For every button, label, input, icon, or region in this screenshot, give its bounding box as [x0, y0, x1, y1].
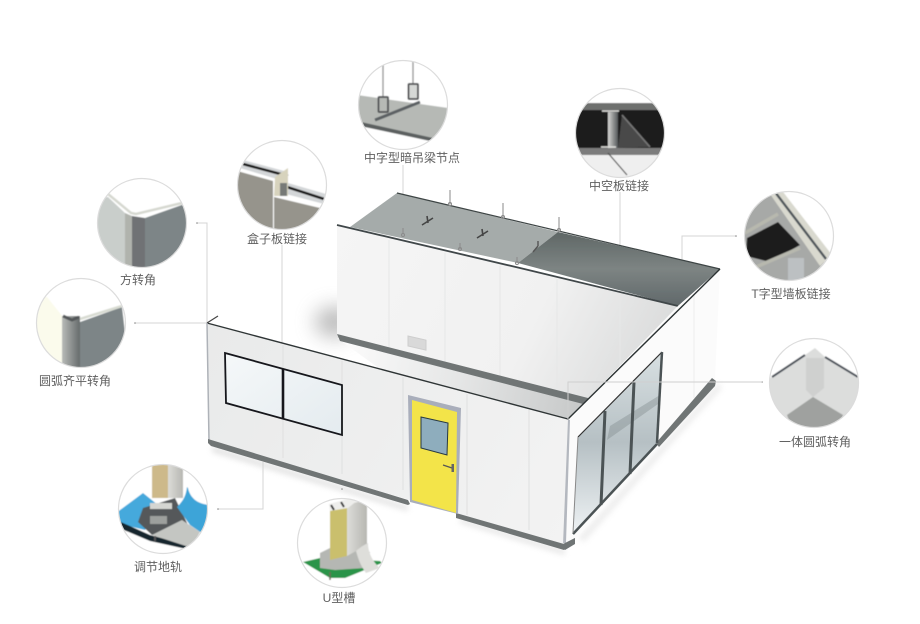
detail: 中空板链接	[576, 102, 664, 177]
right wall skirting	[656, 378, 716, 447]
detail: U型槽	[302, 500, 382, 580]
label: 一体圆弧转角: 一体圆弧转角	[779, 434, 851, 449]
detail: 一体圆弧转角	[770, 348, 858, 427]
hanger rods	[402, 190, 560, 264]
inner floor	[337, 338, 587, 419]
label: 方转角: 方转角	[120, 272, 156, 287]
ceiling: dark panels	[518, 232, 720, 306]
front skirting	[208, 439, 410, 505]
front wall	[207, 323, 568, 545]
detail: 盒子板链接	[238, 160, 325, 229]
corner floor post	[562, 419, 570, 543]
detail: 中字型暗吊梁节点	[359, 62, 447, 142]
right wall beyond window	[563, 269, 720, 545]
label: 盒子板链接: 盒子板链接	[247, 231, 307, 246]
label: 中空板链接: 中空板链接	[589, 178, 649, 193]
cleanroom building	[207, 190, 720, 550]
leader line: 一体圆弧转角	[568, 382, 762, 419]
leader lines	[134, 165, 763, 510]
label: 中字型暗吊梁节点: 中字型暗吊梁节点	[364, 150, 460, 165]
glass wall	[573, 352, 662, 533]
label: U型槽: U型槽	[323, 591, 355, 605]
detail: 调节地轨	[119, 465, 207, 548]
observation window	[225, 353, 342, 435]
label: 调节地轨: 调节地轨	[134, 560, 182, 574]
back wall	[337, 225, 678, 400]
label: T字型墙板链接: T字型墙板链接	[751, 286, 831, 301]
back wall seams	[389, 240, 620, 392]
door	[408, 395, 461, 514]
ground shadows	[212, 307, 722, 555]
back wall skirting	[337, 334, 588, 405]
vent	[408, 336, 426, 350]
detail: 圆弧齐平转角	[37, 297, 125, 367]
ceiling: light panels	[350, 193, 558, 263]
detail: 方转角	[98, 194, 186, 267]
label: 圆弧齐平转角: 圆弧齐平转角	[39, 373, 111, 388]
front wall seams	[283, 345, 529, 530]
detail: T字型墙板链接	[745, 192, 830, 280]
